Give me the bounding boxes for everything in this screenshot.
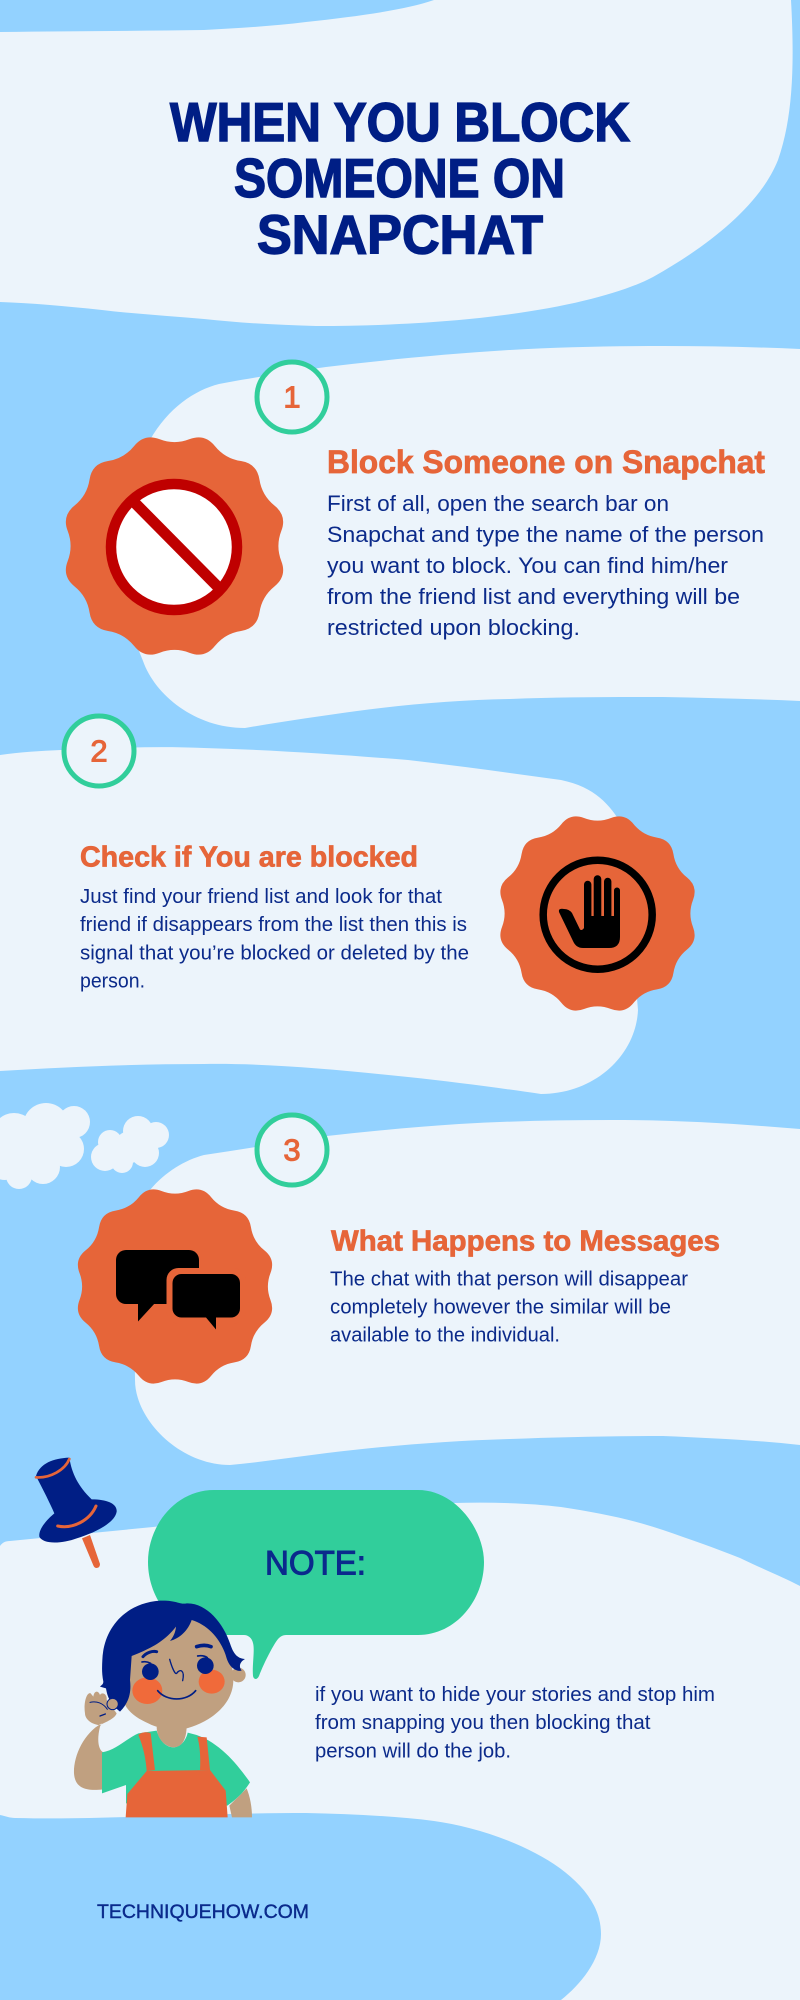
step 1 number circle [257,362,327,432]
step 3 body text: The chat with that person will disappear [330,1268,688,1290]
boy fingertip loop [107,1698,118,1710]
note body text: from snapping you then blocking that [315,1711,651,1734]
icon: step 1 badge with prohibition sign [66,437,283,655]
boy brows, nose, mouth and finger lines [90,1645,211,1716]
note body text: if you want to hide your stories and stop him [315,1683,715,1706]
icon: push pin [36,1458,117,1568]
boy face [123,1619,233,1729]
step 1 body text: from the friend list and everything will be [327,584,740,609]
step 3 body text: completely however the similar will be [330,1296,671,1318]
panel: step 3 blob [134,1120,800,1465]
boy hair [100,1601,245,1712]
step 2 heading: Check if You are blocked [80,842,418,874]
step 1 body text: First of all, open the search bar on [327,491,669,516]
boy left arm and hand [74,1692,117,1790]
icon: step 3 badge with chat bubbles [78,1189,272,1384]
title: SNAPCHAT [257,204,543,266]
note heading: NOTE: [265,1544,366,1582]
note body text [315,1683,715,1762]
step 1 number circle: 1 [283,380,301,414]
boy overalls [126,1732,228,1817]
step 3 number circle [257,1115,327,1185]
cloud left [0,1103,90,1189]
title [170,91,630,266]
step 2 number circle: 2 [90,734,108,768]
boy shirt [102,1731,250,1806]
step 2 body text: person. [80,970,145,992]
step 1 body text: Snapchat and type the name of the person [327,522,764,547]
icon: step 2 badge with stop hand [500,816,695,1011]
boy eyes [142,1657,214,1680]
boy right arm [229,1788,252,1817]
title: SOMEONE ON [234,147,565,209]
step 1 heading: Block Someone on Snapchat [327,444,765,480]
boy ear [231,1668,246,1682]
step 3 number circle: 3 [283,1132,301,1168]
step 2 body text: signal that you’re blocked or deleted by the [80,942,469,964]
panel: step 2 blob [0,747,638,1094]
step 2 body text: Just find your friend list and look for that [80,886,442,908]
note speech bubble [148,1490,484,1679]
footer website label: TECHNIQUEHOW.COM [97,1901,309,1923]
step 2 body text [80,886,469,992]
step 3 body text: available to the individual. [330,1324,560,1346]
step 2 number circle [64,716,134,786]
step 1 body text: restricted upon blocking. [327,615,580,640]
step 2 body text: friend if disappears from the list then this is [80,914,467,936]
title: WHEN YOU BLOCK [170,91,630,153]
panel: step 1 blob [124,346,800,728]
panel: title blob [0,0,793,326]
step 1 body text: you want to block. You can find him/her [327,553,728,578]
panel: note blob [0,1503,800,2000]
boy cheeks [132,1670,225,1704]
boy neck [157,1725,187,1747]
step 1 body text [327,491,764,640]
note body text: person will do the job. [315,1740,511,1762]
step 3 heading: What Happens to Messages [331,1226,720,1258]
panel: footer blue blob [0,1813,601,2000]
step 3 body text [330,1268,688,1346]
character: boy [74,1601,252,1817]
cloud right [91,1116,169,1173]
